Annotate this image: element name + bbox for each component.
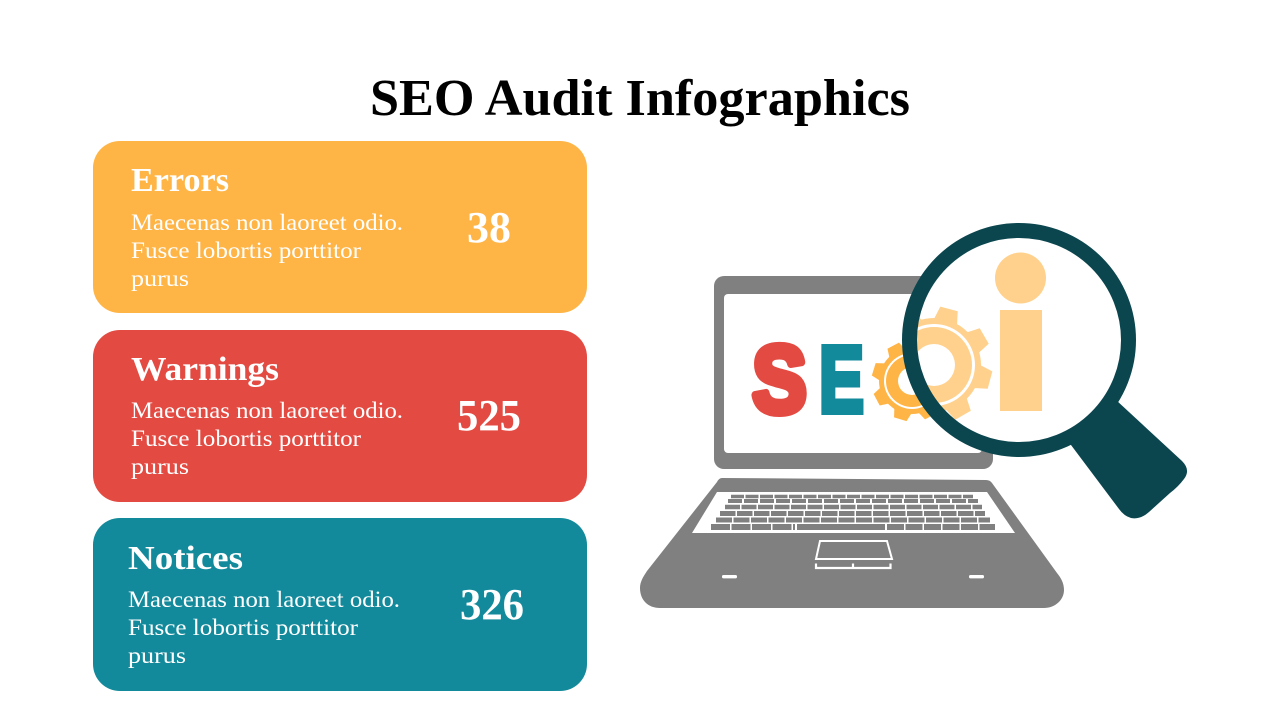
text block: errors description: Maecenas non laoreet odio. <box>131 210 403 235</box>
text block: notices description <box>128 587 400 668</box>
number: errors count: 38 <box>467 203 511 252</box>
icon: light gear in lens <box>917 306 992 420</box>
icon: magnifying glass <box>887 230 1187 518</box>
icon: letter i <box>995 252 1046 411</box>
icon: laptop with SEO magnifier <box>640 230 1187 608</box>
laptop screen <box>714 276 993 469</box>
heading: warnings: Warnings <box>131 351 279 388</box>
text block: notices description: Fusce lobortis porttitor <box>128 615 358 640</box>
text block: warnings description: Maecenas non laoreet odio. <box>131 398 403 423</box>
trackpad <box>816 541 892 568</box>
magnifier handle <box>1068 400 1187 518</box>
text block: notices description: Maecenas non laoreet odio. <box>128 587 400 612</box>
lens interior <box>909 230 1129 450</box>
panel: warnings <box>93 330 587 502</box>
laptop slots <box>722 575 984 578</box>
heading: errors: Errors <box>131 162 229 199</box>
heading: notices: Notices <box>128 540 243 577</box>
laptop base <box>640 478 1064 608</box>
text block: warnings description: purus <box>131 454 189 479</box>
text block: warnings description: Fusce lobortis porttitor <box>131 426 361 451</box>
text block: warnings description <box>131 398 403 479</box>
letter S: S <box>752 327 806 433</box>
text block: errors description: purus <box>131 266 189 291</box>
letter E: E <box>819 327 864 433</box>
number: notices count: 326 <box>460 580 524 629</box>
magnifier ring <box>910 230 1128 450</box>
icon: orange gear <box>871 340 953 422</box>
panel: notices <box>93 518 587 691</box>
title: SEO Audit Infographics <box>370 70 910 127</box>
panel: errors <box>93 141 587 313</box>
keyboard <box>692 492 1015 533</box>
text block: errors description: Fusce lobortis porttitor <box>131 238 361 263</box>
text block: errors description <box>131 210 403 291</box>
text block: notices description: purus <box>128 643 186 668</box>
number: warnings count: 525 <box>457 391 521 440</box>
